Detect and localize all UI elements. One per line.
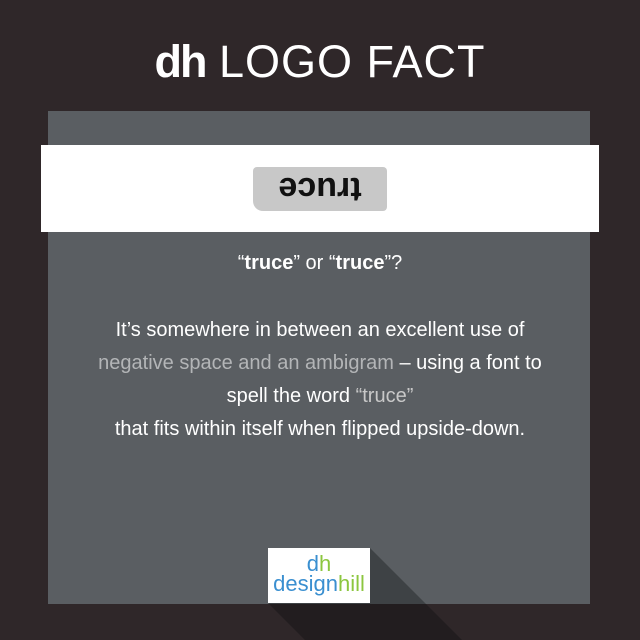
panel xyxy=(48,111,590,604)
body text xyxy=(98,319,542,440)
title: dh LOGO FACT xyxy=(154,36,486,87)
designhill logo: dh xyxy=(307,551,331,576)
question: “truce” or “truce”? xyxy=(238,252,402,274)
designhill logo xyxy=(268,548,370,603)
body text: that fits within itself when flipped upside-down. xyxy=(115,418,525,440)
white band xyxy=(41,145,599,232)
truce logo: truce xyxy=(278,170,362,208)
truce logo xyxy=(253,167,387,211)
designhill logo: designhill xyxy=(273,571,365,596)
body text: negative space and an ambigram – using a font to xyxy=(98,352,542,374)
body text: It’s somewhere in between an excellent use of xyxy=(116,319,524,341)
shadow xyxy=(268,548,462,640)
body text: spell the word “truce” xyxy=(227,385,413,407)
